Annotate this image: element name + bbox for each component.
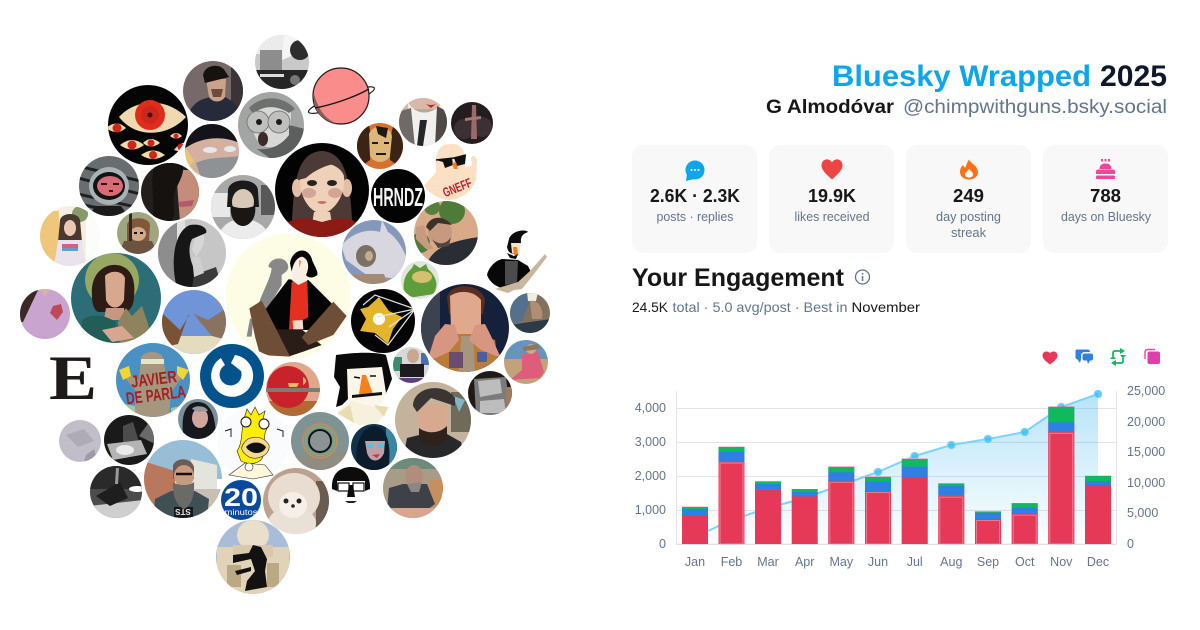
- avatar: guitar man illustration: [487, 230, 547, 293]
- avatar: 20 minutos logo: [220, 479, 262, 521]
- avatar: black and white table: [103, 414, 155, 466]
- avatar: bald man at table: [382, 457, 444, 519]
- avatar: desert high five: [161, 289, 227, 356]
- avatar: dark-haired woman: [140, 162, 200, 222]
- avatar: bald man with sunglasses GNEFF: GNEFF: [440, 175, 474, 200]
- avatar: man in black tee small: [393, 347, 429, 383]
- user name and handle: @chimpwithguns.bsky.social: [903, 97, 1167, 118]
- avatar: small woman dark hood: [177, 398, 219, 440]
- avatar: origami star: [350, 288, 416, 354]
- avatar: glasses cartoon man: [332, 467, 370, 507]
- stat label: [936, 210, 1001, 240]
- bar: Jul: [902, 458, 928, 544]
- avatar: pixel warrior: [116, 211, 160, 255]
- stat label: streak: [951, 226, 987, 240]
- icon: heart: [822, 159, 842, 180]
- bar: Nov: [1048, 407, 1074, 544]
- icon: reposts arrows: [1110, 348, 1126, 366]
- panel: likes received: [769, 145, 894, 253]
- cumulative area: [695, 394, 1098, 544]
- avatar: letter E logo: E: [49, 342, 97, 413]
- avatar: comic face orange: [357, 123, 403, 169]
- right axis labels: 25,000: [1127, 384, 1165, 398]
- avatar: man leaning, green leaves: [414, 201, 478, 265]
- cumulative line: [695, 394, 1098, 537]
- bar: May: [828, 466, 854, 544]
- avatar: colourful girl: [39, 205, 101, 267]
- month labels: Nov: [1050, 555, 1073, 569]
- right axis labels: [1127, 384, 1165, 551]
- chart legend: [1042, 348, 1160, 366]
- avatar: 20 minutos logo: minutos: [224, 507, 258, 517]
- right axis labels: 10,000: [1127, 476, 1165, 490]
- month labels: May: [829, 555, 854, 569]
- stacked bars: [682, 407, 1111, 544]
- engagement summary: [632, 299, 920, 315]
- bar: Apr: [792, 489, 818, 544]
- right axis labels: 0: [1127, 537, 1134, 551]
- avatar: white fluffy dog: [262, 467, 330, 539]
- month labels: Dec: [1087, 555, 1109, 569]
- left axis labels: 3,000: [635, 435, 666, 449]
- avatar: pink planet: [306, 68, 376, 124]
- engagement summary: total · 5.0 avg/post · Best in: [672, 299, 848, 315]
- engagement summary: November: [852, 299, 920, 315]
- avatar: woman white shirt and tie: [398, 97, 448, 147]
- avatar: moustache man illustration: [334, 353, 392, 425]
- month labels: Apr: [795, 555, 814, 569]
- left axis labels: 1,000: [635, 503, 666, 517]
- heading: your engagement: Your Engagement: [632, 264, 845, 292]
- avatar: helmet portrait: [78, 155, 140, 217]
- avatar: woman lilac t-shirt: [19, 288, 71, 340]
- avatar: bearded man engraving: [210, 174, 276, 240]
- avatar: blue ring logo: [199, 343, 265, 409]
- icon: info: [856, 270, 870, 284]
- avatar: grey goggles kid: [237, 91, 305, 159]
- avatar: big illustrated person in cream circle: [225, 233, 351, 359]
- user name and handle: [766, 97, 1167, 118]
- avatar: grey sketch: [58, 419, 102, 463]
- stat label: likes received: [794, 210, 870, 224]
- panel: posts and replies: [632, 145, 757, 253]
- avatar: film still top: [254, 34, 310, 90]
- avatar: woman in pink on the beach: [503, 339, 549, 385]
- avatar: Javier de Parla mummy: DE PARLA: [125, 382, 187, 408]
- panel: days on Bluesky: [1043, 145, 1168, 253]
- user name and handle: G Almodóvar: [766, 97, 895, 118]
- engagement summary: 24.5K: [632, 299, 669, 315]
- month labels: Aug: [940, 555, 962, 569]
- avatar: woman with mask: [185, 124, 239, 178]
- avatar: dark tree: [450, 101, 494, 145]
- icon: speech bubble: [686, 160, 704, 181]
- avatar: letter E logo: [32, 336, 114, 418]
- avatar: blue-haired girl: [350, 423, 398, 471]
- right axis labels: 20,000: [1127, 415, 1165, 429]
- combined engagement chart: [635, 384, 1165, 569]
- bar: Jan: [682, 506, 708, 544]
- bar: Jun: [865, 476, 891, 544]
- avatar: long-bearded man at plaza: STS: [175, 507, 191, 516]
- icon: likes heart: [1042, 351, 1058, 364]
- left axis labels: [635, 401, 666, 551]
- avatar: Javier de Parla mummy: JAVIER: [130, 367, 178, 392]
- avatar: red apple on board: [265, 361, 321, 417]
- avatar: painted woman with cat: [70, 252, 162, 344]
- month labels: Mar: [757, 555, 779, 569]
- avatar: man in flat cap: [394, 381, 472, 459]
- avatar: yellow wild Homer: [217, 407, 289, 479]
- stat label: days on Bluesky: [1061, 210, 1152, 224]
- stat label: day posting: [936, 210, 1001, 224]
- avatar: long-bearded man at plaza: [143, 439, 223, 519]
- right axis labels: 5,000: [1127, 506, 1158, 520]
- bar: Feb: [718, 446, 744, 544]
- cumulative points: [874, 390, 1102, 476]
- avatar: woman black and white: [157, 218, 227, 288]
- avatar: man pulling smile: [420, 283, 510, 373]
- month labels: Feb: [721, 555, 742, 569]
- stat value: 788: [1090, 186, 1121, 206]
- avatar: Taj Mahal jump: [215, 519, 291, 597]
- avatar: woman anime portrait: [274, 142, 370, 238]
- month labels: Oct: [1015, 555, 1035, 569]
- month labels: Jul: [907, 555, 923, 569]
- left axis labels: 2,000: [635, 469, 666, 483]
- left axis labels: 0: [659, 537, 666, 551]
- avatar: Javier de Parla mummy: [115, 342, 191, 418]
- month labels: Jun: [868, 555, 888, 569]
- avatar: small top right figure: [509, 292, 551, 334]
- avatar: man with black cap: [182, 60, 244, 122]
- month labels: Jan: [685, 555, 705, 569]
- avatar: green frog: [400, 260, 440, 300]
- title: Bluesky Wrapped: [832, 60, 1091, 93]
- avatar cluster: [19, 34, 551, 597]
- avatar: HRNDZ logo: [370, 168, 426, 224]
- left axis labels: 4,000: [635, 401, 666, 415]
- bar: Mar: [755, 481, 781, 544]
- avatar: 20 minutos logo: 20: [224, 484, 258, 512]
- gridlines and axes: [676, 391, 1116, 544]
- bar: Oct: [1012, 503, 1038, 544]
- panel: day posting streak: [906, 145, 1031, 253]
- month labels: [685, 555, 1109, 569]
- avatar: printed t-shirt: [467, 370, 513, 416]
- icon: quotes squares: [1145, 350, 1160, 364]
- icon: cake: [1096, 159, 1115, 179]
- avatar: concentric rings: [290, 411, 350, 471]
- bar: Aug: [938, 483, 964, 544]
- stat value: 249: [953, 186, 984, 206]
- stat label: posts · replies: [656, 210, 734, 224]
- stat value: 19.9K: [808, 186, 856, 206]
- month labels: Sep: [977, 555, 999, 569]
- avatar: black and white rocks: [90, 466, 142, 518]
- avatar: bald man with sunglasses GNEFF: [424, 144, 477, 200]
- stat value: 2.6K · 2.3K: [650, 186, 740, 206]
- right axis labels: 15,000: [1127, 445, 1165, 459]
- icon: flame: [960, 160, 978, 180]
- avatar: red eyes: [106, 84, 192, 166]
- avatar: cubone skull: [341, 219, 408, 285]
- bar: Sep: [975, 511, 1001, 544]
- bar: Dec: [1085, 475, 1111, 544]
- icon: replies bubbles: [1076, 350, 1093, 364]
- avatar: HRNDZ logo: HRNDZ: [373, 182, 423, 212]
- title: 2025: [1100, 60, 1167, 93]
